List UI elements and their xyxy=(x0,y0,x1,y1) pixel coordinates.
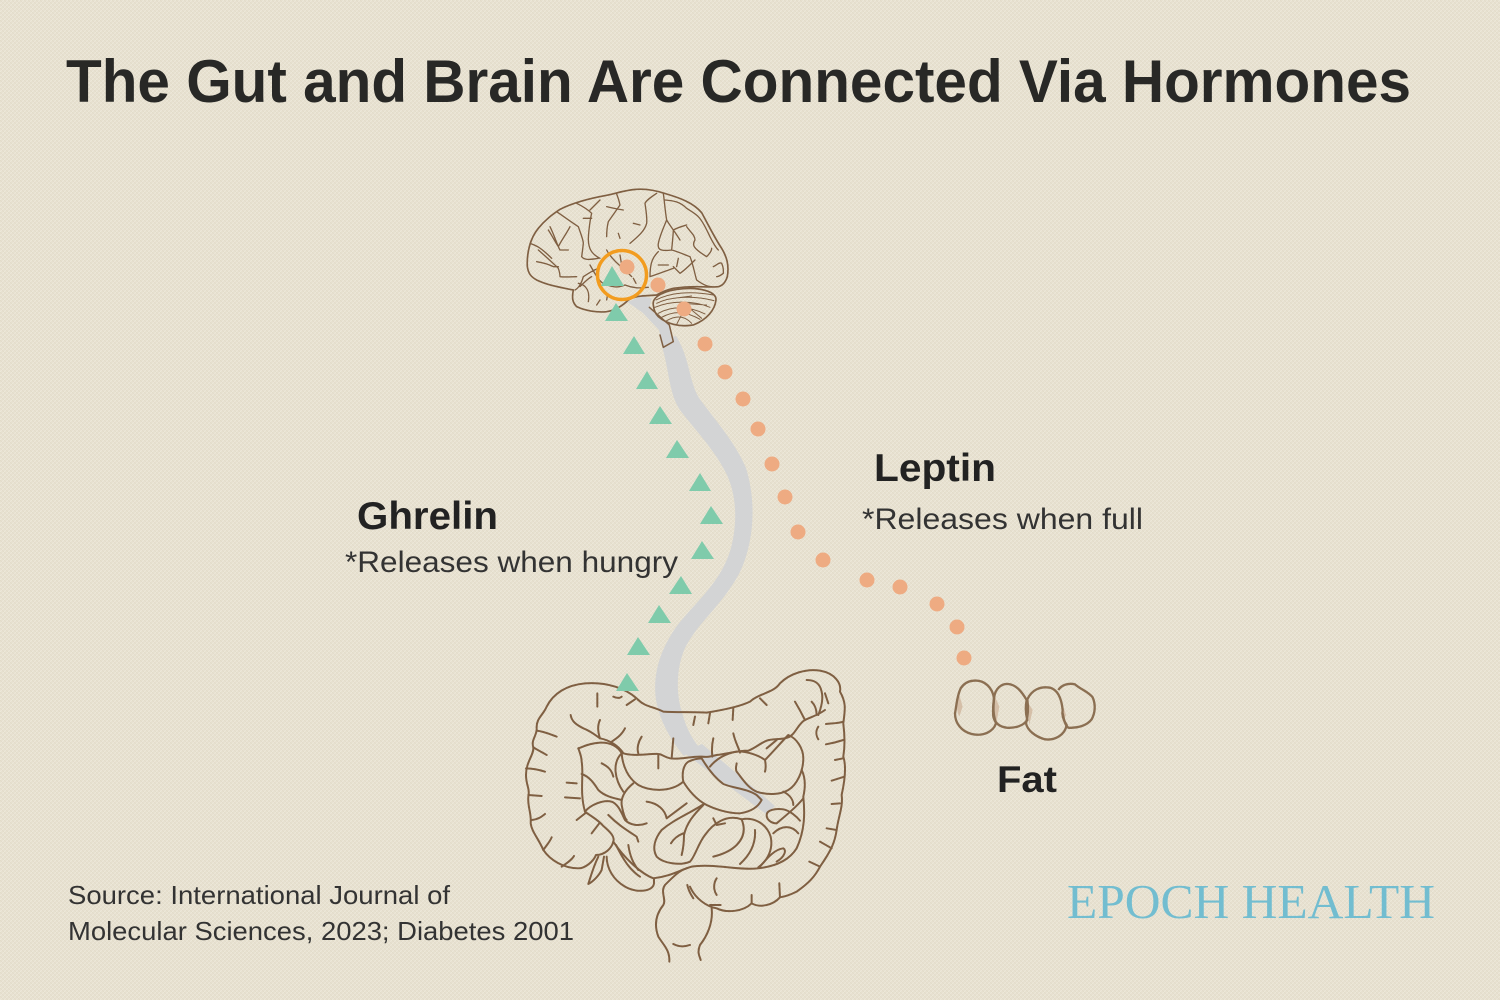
cecum and appendix xyxy=(588,845,654,891)
leptin markers (orange dots) xyxy=(620,260,972,666)
fat cell shading xyxy=(957,695,1066,725)
source note: Source: International Journal of xyxy=(68,880,451,910)
label: ghrelin: Ghrelin xyxy=(357,495,498,538)
haustra folds xyxy=(526,680,844,905)
rectum xyxy=(656,868,712,962)
title: The Gut and Brain Are Connected Via Hormones xyxy=(66,48,1411,115)
large intestine outer wall xyxy=(526,683,638,868)
source note: Molecular Sciences, 2023; Diabetes 2001 xyxy=(68,916,574,946)
source note xyxy=(68,880,574,946)
label: fat: Fat xyxy=(997,759,1057,800)
logo: Epoch Health: EPOCH HEALTH xyxy=(1067,874,1435,929)
brainstem xyxy=(627,296,674,347)
icon: fat cells xyxy=(955,681,1095,740)
brain folds xyxy=(530,193,723,305)
hypothalamus highlight ring xyxy=(598,250,646,300)
label: leptin: Leptin xyxy=(874,447,996,490)
label: leptin note: *Releases when full xyxy=(862,503,1143,536)
small intestine loops xyxy=(578,743,762,813)
transverse colon lower wall xyxy=(571,715,805,759)
icon: intestines xyxy=(526,670,845,962)
icon: brain xyxy=(527,189,728,347)
label: ghrelin note: *Releases when hungry xyxy=(345,546,678,579)
brain outline xyxy=(527,189,728,312)
cerebellum xyxy=(653,288,716,326)
gut-brain pathway (grey nerve) xyxy=(655,336,775,814)
ghrelin markers (green triangles) xyxy=(601,266,723,691)
